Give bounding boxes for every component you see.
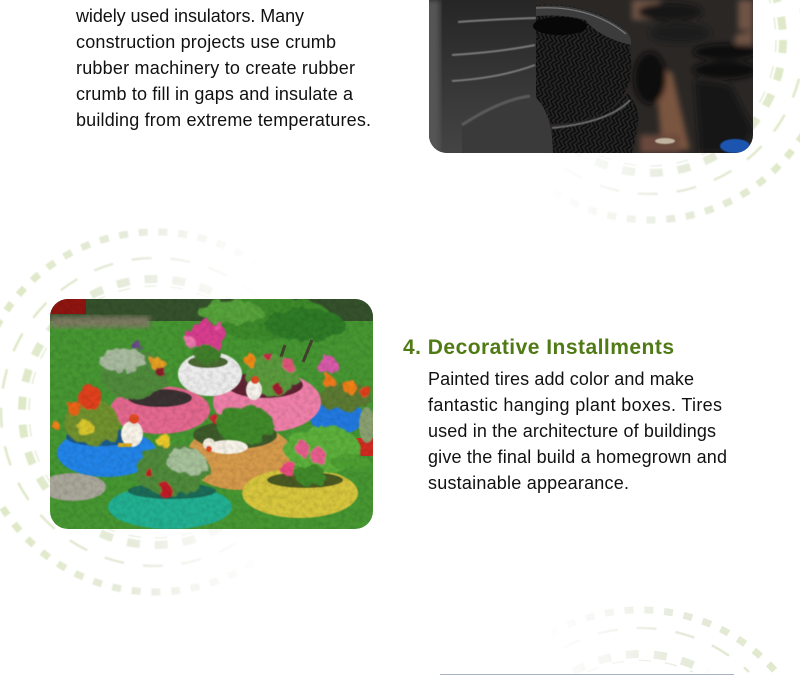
- decorative ring: bottom right: [504, 610, 776, 672]
- foliage left: [98, 341, 169, 399]
- text block: insulation description: widely used insulators. Many: [75, 6, 304, 26]
- photo: stacked black tires: [422, 0, 757, 153]
- blue right tire: [310, 403, 362, 434]
- text block: insulation description: [75, 6, 371, 130]
- text block: decorative installments description: give the final build a homegrown and: [428, 447, 727, 467]
- text block: decorative installments description: Painted tires add color and make: [428, 369, 694, 389]
- white tire: [178, 352, 242, 396]
- left pink tire: [110, 386, 210, 434]
- pink petunias and leaves: [280, 426, 370, 485]
- blue left tire: [57, 428, 157, 477]
- decorative ring: top right: [470, 0, 800, 220]
- white-green flowers: [134, 433, 210, 497]
- text block: decorative installments description: [428, 369, 727, 493]
- text block: decorative installments description: fantastic hanging plant boxes. Tires: [428, 395, 722, 415]
- text block: decorative installments description: sustainable appearance.: [428, 473, 629, 493]
- foliage centre: [212, 405, 273, 445]
- foliage and flowers left: [51, 385, 120, 445]
- text block: decorative installments description: used in the architecture of buildings: [428, 421, 716, 441]
- tan tire: [186, 421, 294, 490]
- text block: insulation description: crumb to fill in gaps and insulate a: [76, 84, 354, 104]
- white chicken left: [118, 414, 143, 447]
- pink flowers: [185, 321, 227, 363]
- foliage right: [244, 352, 298, 395]
- tree foliage: [198, 296, 345, 341]
- teal tire: [108, 483, 232, 529]
- white chicken centre: [203, 438, 248, 454]
- text block: insulation description: building from extreme temperatures.: [76, 110, 371, 130]
- white chicken: [246, 376, 262, 400]
- yellow tire: [242, 468, 358, 518]
- text block: insulation description: construction projects use crumb: [76, 32, 336, 52]
- flowers right: [317, 355, 373, 411]
- photo: next image top edge: [440, 674, 734, 675]
- grey tire: [40, 473, 106, 501]
- right pink tire: [213, 372, 321, 432]
- text block: insulation description: rubber machinery to create rubber: [76, 58, 355, 78]
- photo: painted tire planters: [40, 296, 375, 529]
- heading: 4. Decorative Installments: 4. Decorative Installments: [403, 336, 674, 359]
- decorative ring: left: [0, 232, 335, 592]
